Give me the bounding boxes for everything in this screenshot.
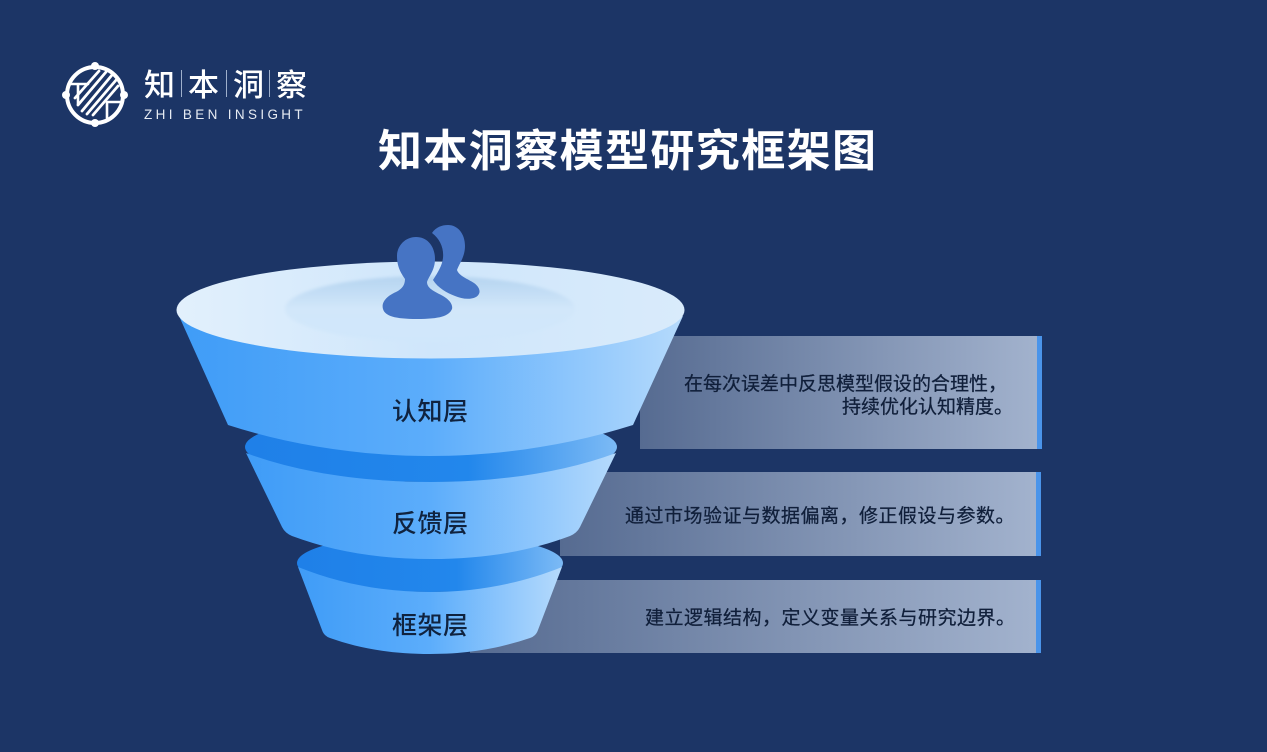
logo english name: ZHI BEN INSIGHT (144, 107, 306, 122)
icon: back person (432, 225, 480, 299)
title: 知本洞察模型研究框架图 (378, 127, 877, 176)
panel: framework description (470, 580, 1041, 653)
icon: logo emblem (62, 62, 128, 127)
funnel top rim (176, 262, 684, 358)
label: framework layer: 框架层 (392, 612, 469, 640)
panel: cognition description (640, 336, 1042, 449)
label: feedback layer: 反馈层 (392, 510, 469, 538)
text: cognition description: 在每次误差中反思模型假设的合理性， (684, 373, 1007, 395)
logo wordmark (144, 68, 307, 103)
icon: front person (383, 237, 452, 319)
panel: feedback description (560, 472, 1041, 556)
logo (62, 62, 307, 127)
logo wordmark: 察 (276, 68, 307, 103)
logo wordmark: 知 (144, 68, 175, 103)
logo wordmark: 洞 (233, 68, 264, 103)
icon: two people (383, 225, 480, 319)
text: framework description: 建立逻辑结构，定义变量关系与研究边界。 (645, 607, 1016, 629)
funnel tier: feedback layer (245, 412, 617, 559)
logo wordmark: 本 (188, 68, 219, 103)
funnel tier: cognition layer (176, 262, 684, 456)
funnel tier: framework layer (297, 534, 563, 654)
text: cognition description: 持续优化认知精度。 (842, 396, 1013, 418)
funnel inner recess (285, 276, 575, 342)
label: cognition layer: 认知层 (392, 398, 469, 426)
text: feedback description: 通过市场验证与数据偏离，修正假设与参数。 (625, 505, 1015, 527)
